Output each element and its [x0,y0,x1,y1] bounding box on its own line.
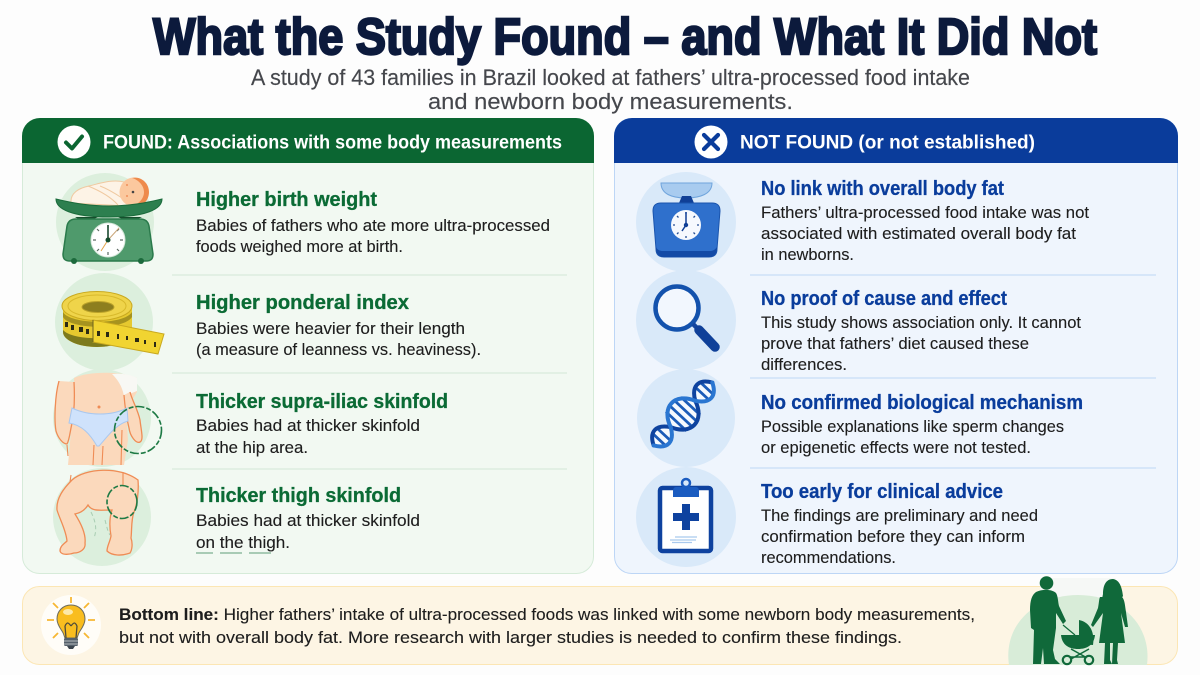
text: higher ponderal index [196,292,481,359]
icon: blue scale [636,172,736,272]
subtitle: and newborn body measurements. [428,89,793,114]
text: too early for clinical advice: confirmation before they can inform [761,528,1025,546]
subtitle [251,65,970,114]
text: no proof of cause and effect: No proof of cause and effect [761,288,1007,310]
panel: bottom line [22,576,1178,665]
icon: baby thigh with skinfold marker [53,468,151,566]
text: no confirmed biological mechanism: No confirmed biological mechanism [761,392,1083,414]
text: bottom line: but not with overall body fat. More research with larger studies is needed to confirm these findings. [119,628,902,647]
icon: DNA helix [637,369,735,467]
text: no proof of cause and effect [761,288,1082,374]
text: no link with overall body fat [761,178,1090,264]
text: thicker supra-iliac skinfold [196,391,448,457]
text: thicker supra-iliac skinfold: at the hip area. [196,439,308,457]
not found header [614,118,1178,163]
text: higher birth weight: Higher birth weight [196,189,377,211]
text: no link with overall body fat: Fathers’ ultra-processed food intake was not [761,204,1090,222]
text: too early for clinical advice: The findings are preliminary and need [761,507,1038,525]
text: no link with overall body fat: in newborns. [761,246,854,264]
not found header: NOT FOUND (or not established) [740,132,1035,154]
text: higher birth weight: foods weighed more at birth. [196,238,403,256]
text: bottom line [119,605,975,647]
panel: not found [614,118,1178,574]
text: no link with overall body fat: associated with estimated overall body fat [761,225,1077,243]
text: bottom line: Bottom line: Higher fathers’ intake of ultra-processed foods was linked with some newborn body measurements, [119,605,975,624]
text: higher ponderal index: (a measure of leanness vs. heaviness). [196,341,481,359]
icon: clipboard with medical cross [636,467,736,567]
icon: light bulb [41,595,101,655]
text: no proof of cause and effect: differences. [761,356,847,374]
icon: baby on scale [56,173,162,271]
text: too early for clinical advice: recommendations. [761,549,896,567]
text: no confirmed biological mechanism: or epigenetic effects were not tested. [761,439,1031,457]
text: thicker thigh skinfold: Thicker thigh skinfold [196,485,401,507]
found header: FOUND: Associations with some body measurements [103,132,562,154]
text: higher birth weight: Babies of fathers who ate more ultra-processed [196,217,550,235]
text: too early for clinical advice [761,481,1038,567]
text: no confirmed biological mechanism [761,392,1083,457]
text: thicker thigh skinfold [196,485,420,553]
icon: baby hip with skinfold marker [53,369,162,467]
panel: found [22,118,594,574]
text: no proof of cause and effect: prove that fathers’ diet caused these [761,335,1029,353]
text: thicker thigh skinfold: on the thigh. [196,534,290,552]
subtitle: A study of 43 families in Brazil looked at fathers’ ultra-processed food intake [251,65,970,90]
text: thicker supra-iliac skinfold: Thicker supra-iliac skinfold [196,391,448,413]
text: no link with overall body fat: No link with overall body fat [761,178,1004,200]
text: higher ponderal index: Higher ponderal index [196,292,409,314]
found header [22,118,594,163]
icon: magnifying glass [636,270,736,370]
icon: family with stroller [1008,576,1148,665]
text: no proof of cause and effect: This study shows association only. It cannot [761,314,1082,332]
text: thicker thigh skinfold: Babies had at thicker skinfold [196,512,420,530]
text: higher birth weight [196,189,550,256]
text: thicker supra-iliac skinfold: Babies had at thicker skinfold [196,417,420,435]
title: What the Study Found – and What It Did Not [153,8,1097,65]
text: too early for clinical advice: Too early for clinical advice [761,481,1003,503]
text: no confirmed biological mechanism: Possible explanations like sperm changes [761,418,1064,436]
text: higher ponderal index: Babies were heavier for their length [196,320,465,338]
icon: measuring tape [55,273,164,371]
